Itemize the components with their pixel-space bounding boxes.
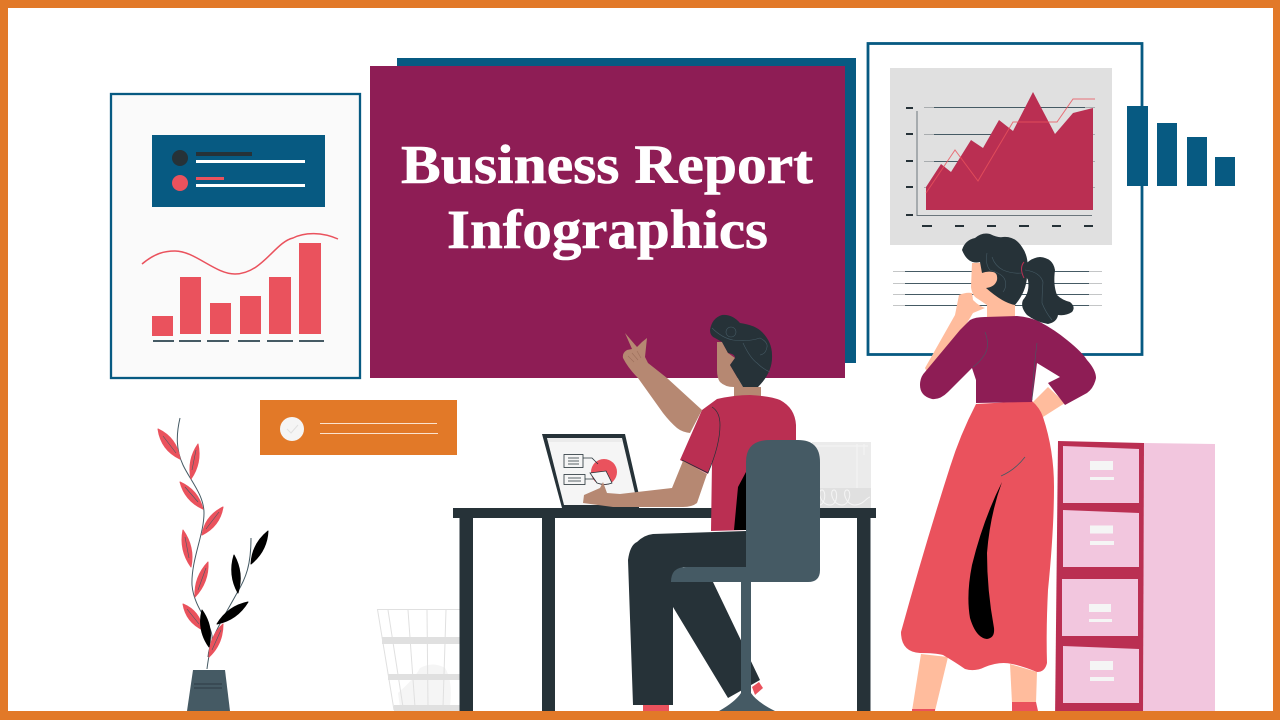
man: shoes (643, 682, 763, 711)
waste basket (378, 610, 460, 711)
man: raised arm pointing (623, 333, 702, 433)
title: Business Report (401, 134, 814, 195)
area chart panel (890, 68, 1112, 245)
man: sleeve seam (682, 407, 720, 473)
title: Infographics (447, 199, 768, 260)
legend box (152, 135, 325, 207)
laptop screen flow boxes (564, 454, 598, 484)
man: hair strands (712, 327, 770, 372)
man: shirt (680, 395, 796, 531)
cabinet drawer one (1063, 446, 1139, 503)
man: arm on laptop (583, 461, 707, 507)
cabinet drawer four (1063, 646, 1139, 703)
woman: skirt slit (968, 482, 1002, 639)
woman: top (920, 316, 1096, 405)
man sitting at desk (583, 315, 796, 711)
panel: title background shadow (397, 58, 856, 363)
woman: neck and face (971, 262, 1015, 317)
printer behind desk (812, 442, 871, 508)
laptop screen pie chart (591, 459, 617, 485)
woman: ponytail (1022, 257, 1074, 324)
desk (453, 508, 876, 711)
woman: hair strands and tie (986, 253, 1052, 320)
bar chart axis labels (153, 340, 324, 342)
woman: hair (962, 234, 1028, 305)
woman: hand on chin (925, 293, 985, 372)
blue declining bars (1127, 106, 1235, 186)
man: pointing hand fingers (628, 351, 641, 362)
title (401, 134, 814, 260)
orange check note (260, 400, 457, 455)
icon: potted plant (158, 418, 268, 711)
trend curve (142, 234, 338, 274)
laptop (542, 434, 639, 508)
woman: top seams (973, 332, 1037, 400)
man: head and neck (717, 342, 761, 400)
cabinet drawer three (1062, 579, 1138, 636)
woman: hand on hip (1033, 387, 1065, 417)
cabinet drawer two (1063, 510, 1139, 567)
text lines under chart (893, 272, 1102, 306)
panel: left report sheet (111, 94, 360, 378)
filing cabinet (1055, 441, 1215, 720)
woman: skirt (901, 401, 1054, 672)
woman standing (901, 234, 1096, 711)
man: pants (628, 531, 760, 705)
woman: shoes (912, 702, 1038, 711)
office chair (671, 440, 820, 711)
woman: legs (912, 654, 1037, 711)
plant pot (187, 670, 230, 711)
panel: title background (370, 66, 845, 378)
man: back shadow (734, 472, 746, 530)
man: hair (710, 315, 772, 387)
panel: right report sheet (868, 44, 1142, 354)
bar chart: rising red bars (152, 243, 321, 336)
